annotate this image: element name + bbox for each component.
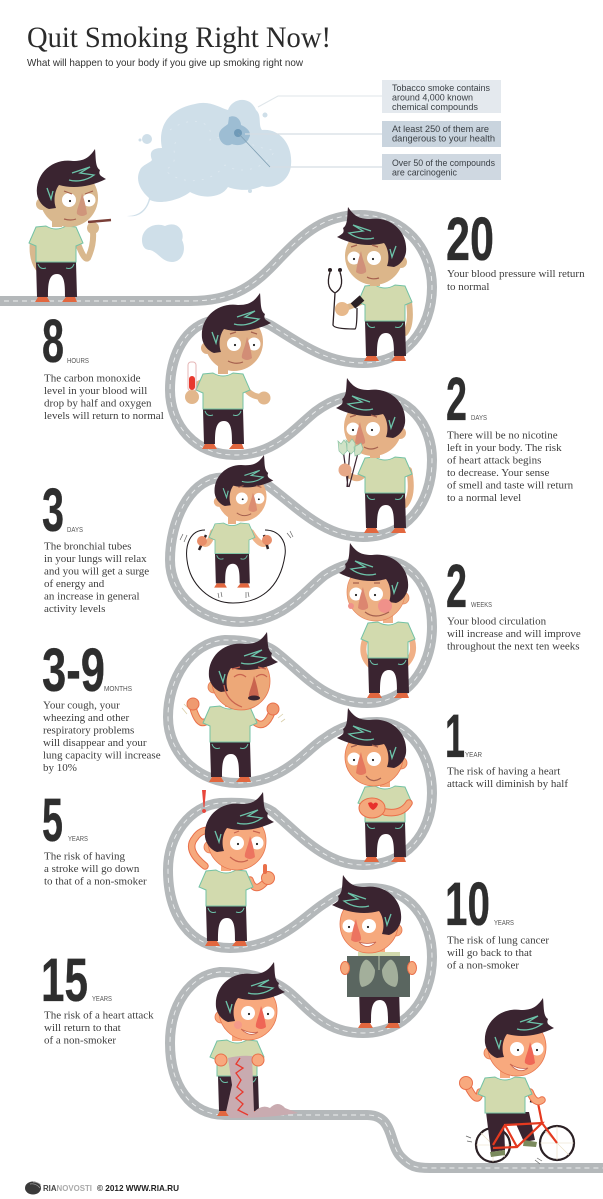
stat: 2 weeks bbox=[446, 552, 581, 652]
figure: smelling flowers bbox=[336, 378, 412, 533]
stat: 2 weeks: will increase and will improve bbox=[447, 628, 581, 640]
figure: blood pressure bbox=[328, 207, 412, 361]
figure: stroke risk bbox=[192, 790, 274, 946]
callout connector lines bbox=[238, 96, 382, 167]
callout: 250 dangerous: At least 250 of them are bbox=[392, 124, 489, 135]
callout: 250 dangerous bbox=[382, 121, 501, 147]
footer: logo and copyright: RIANOVOSTI bbox=[43, 1184, 92, 1193]
stat: 5 years: 5 bbox=[42, 786, 63, 854]
stat: 5 years: The risk of having bbox=[44, 850, 125, 862]
stat: 10 years: YEARS bbox=[494, 918, 514, 927]
stat: 2 weeks: throughout the next ten weeks bbox=[447, 640, 580, 652]
figure: lung x-ray bbox=[332, 875, 416, 1028]
stat: 2 weeks: Your blood circulation bbox=[447, 616, 547, 628]
stat: 3 days: The bronchial tubes bbox=[44, 540, 131, 552]
figure: heart bbox=[337, 708, 412, 862]
stat: 2 days: DAYS bbox=[471, 413, 487, 422]
stat: 3-9 months bbox=[42, 636, 161, 774]
stat: 3-9 months: lung capacity will increase bbox=[43, 750, 161, 762]
stat: 3-9 months: wheezing and other bbox=[43, 712, 129, 724]
icon: bicycle bbox=[476, 1118, 574, 1162]
stat: 2 days: 2 bbox=[446, 365, 467, 433]
stat: 10 years: will go back to that bbox=[447, 947, 532, 959]
stat: 3 days: and you will get a surge bbox=[44, 566, 149, 578]
stat: 15 years: YEARS bbox=[92, 994, 112, 1003]
smoke cloud bbox=[127, 100, 291, 262]
stat: 10 years: 10 bbox=[445, 870, 490, 938]
stat: 2 days: of smell and taste will return bbox=[447, 480, 574, 492]
callout: 50 carcinogenic: are carcinogenic bbox=[392, 168, 457, 178]
callout: 50 carcinogenic: Over 50 of the compounds bbox=[392, 158, 495, 169]
winding road bbox=[0, 215, 603, 1168]
stat: 1 year: YEAR bbox=[465, 750, 482, 759]
stat: 15 years: of a non-smoker bbox=[44, 1034, 116, 1046]
stat: 20: Your blood pressure will return bbox=[447, 268, 585, 280]
callout: 4,000 compounds bbox=[382, 80, 501, 113]
stat: 2 days: to decrease. Your sense bbox=[447, 467, 549, 479]
stat: 3-9 months: MONTHS bbox=[104, 684, 132, 693]
stat: 2 days: of heart attack begins bbox=[447, 454, 541, 466]
stat: 3 days bbox=[42, 476, 149, 615]
stat: 8 hours bbox=[42, 307, 164, 422]
footer: logo and copyright: © 2012 WWW.RIA.RU bbox=[97, 1183, 179, 1193]
stat: 5 years bbox=[42, 786, 147, 888]
stat: 3-9 months: respiratory problems bbox=[43, 724, 134, 736]
stat: 15 years bbox=[41, 946, 154, 1046]
stat: 1 year: attack will diminish by half bbox=[447, 778, 568, 790]
stat: 15 years: will return to that bbox=[44, 1022, 121, 1034]
stat: 3 days: in your lungs will relax bbox=[44, 553, 147, 565]
stat: 3 days: an increase in general bbox=[44, 590, 140, 602]
callout: 50 carcinogenic bbox=[382, 154, 501, 180]
figure: coughing bbox=[182, 632, 285, 782]
stat: 2 weeks: 2 bbox=[446, 552, 467, 620]
icon: exclamation mark bbox=[202, 790, 206, 813]
subtitle: What will happen to your body if you give up smoking right now bbox=[27, 57, 303, 69]
stat: 8 hours: The carbon monoxide bbox=[44, 372, 141, 384]
stat: 2 weeks: WEEKS bbox=[471, 600, 492, 609]
icon: flowers bbox=[338, 439, 363, 487]
callout: 4,000 compounds: around 4,000 known bbox=[392, 92, 473, 104]
stat: 2 days: left in your body. The risk bbox=[447, 442, 562, 454]
figure: ECG strip bbox=[210, 962, 298, 1118]
stat: 10 years bbox=[445, 870, 549, 972]
stat: 15 years: The risk of a heart attack bbox=[44, 1010, 154, 1022]
stat: 5 years: YEARS bbox=[68, 834, 88, 843]
callout: 4,000 compounds: chemical compounds bbox=[392, 102, 478, 113]
ECG paper bbox=[226, 1056, 298, 1118]
figure: cycling bbox=[460, 998, 574, 1164]
stat: 3 days: of energy and bbox=[44, 578, 105, 590]
stat: 10 years: The risk of lung cancer bbox=[447, 934, 549, 946]
stat: 2 days: to a normal level bbox=[447, 492, 521, 504]
stat: 10 years: of a non-smoker bbox=[447, 960, 519, 972]
stat: 20: to normal bbox=[447, 281, 489, 293]
stat: 2 days bbox=[446, 365, 574, 504]
stat: 3-9 months: 3-9 bbox=[42, 636, 105, 704]
stat: 5 years: a stroke will go down bbox=[44, 863, 140, 875]
stat: 1 year: The risk of having a heart bbox=[447, 766, 560, 778]
x-ray image bbox=[347, 956, 410, 997]
stat: 8 hours: 8 bbox=[42, 307, 64, 375]
stat: 3-9 months: will disappear and your bbox=[43, 737, 147, 749]
callout: 250 dangerous: dangerous to your health bbox=[392, 134, 495, 144]
stat: 3 days: DAYS bbox=[67, 525, 83, 534]
figure: better circulation bbox=[339, 543, 415, 698]
stat: 20: 20 bbox=[446, 205, 494, 273]
stat: 8 hours: HOURS bbox=[67, 356, 89, 365]
figure: test tube bbox=[185, 293, 271, 449]
footer: logo and copyright bbox=[25, 1182, 179, 1194]
stat: 5 years: to that of a non-smoker bbox=[44, 876, 147, 888]
stat: 8 hours: level in your blood will bbox=[44, 385, 147, 397]
stat: 20 bbox=[446, 205, 585, 293]
stat: 3 days: activity levels bbox=[44, 603, 105, 615]
stat: 2 days: There will be no nicotine bbox=[447, 430, 558, 442]
figure: man smoking bbox=[29, 149, 111, 302]
stat: 1 year: 1 bbox=[445, 702, 465, 770]
stat: 8 hours: drop by half and oxygen bbox=[44, 398, 152, 410]
stat: 8 hours: levels will return to normal bbox=[44, 410, 164, 422]
stat: 3 days: 3 bbox=[42, 476, 64, 544]
stat: 3-9 months: Your cough, your bbox=[43, 700, 120, 712]
title: Quit Smoking Right Now! bbox=[27, 21, 331, 54]
stat: 15 years: 15 bbox=[41, 946, 88, 1014]
stat: 3-9 months: by 10% bbox=[43, 762, 77, 774]
figure: jump rope bbox=[180, 455, 293, 603]
callout: 4,000 compounds: Tobacco smoke contains bbox=[392, 83, 490, 94]
stat: 1 year bbox=[445, 702, 568, 790]
